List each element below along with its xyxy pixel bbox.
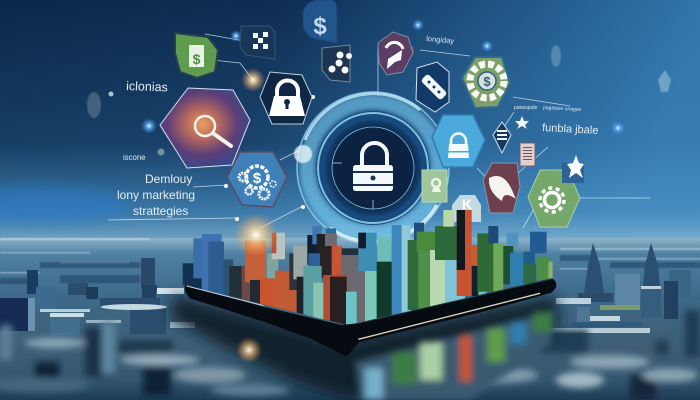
heading: marketing strategies [117, 172, 195, 218]
icon: blue dollar tile [303, 0, 337, 43]
icon: green document hexagon: $ [193, 51, 201, 67]
icon: green document hexagon [175, 33, 218, 78]
icon: blue dollar tile: $ [313, 13, 327, 40]
icon: dark dots tile top [240, 26, 275, 59]
background city: ground plane [0, 238, 700, 400]
icon: pale green tile [422, 170, 447, 202]
icon: gears and dollar hexagon [227, 152, 287, 207]
icon: leaf hexagon [483, 163, 520, 213]
background sky [0, 0, 700, 260]
heading: marketing strategies: strattegies [133, 204, 188, 218]
platform shadow and reflection [170, 295, 560, 400]
connector lines and nodes [108, 34, 650, 228]
central lock disc [325, 120, 421, 216]
label: small right captions: patarsjade [514, 105, 538, 111]
concentric rings glow [297, 92, 449, 244]
label: iscone: iscone [123, 153, 146, 162]
icon: small star [515, 116, 529, 129]
icon: pale K tile: K [462, 196, 472, 212]
decorative light nodes [87, 19, 671, 221]
icon: dark dots tile right [322, 45, 352, 82]
tablet base [185, 278, 556, 357]
label: iclonias: iclonias [126, 79, 168, 94]
label: funbla jbale: funbla jbale [542, 122, 599, 137]
light flares [234, 213, 278, 363]
icon: green gear hexagon [528, 170, 580, 227]
icon: pale K tile [452, 195, 481, 222]
icon: document [520, 143, 535, 166]
icon: gears and dollar hexagon: $ [253, 170, 262, 187]
icon: outlined pill hexagon [416, 62, 449, 112]
label: small right captions: pagelase unagan [543, 105, 582, 113]
icon: green dollar burst hexagon [462, 57, 510, 108]
left background buildings [0, 258, 195, 335]
miniature skyline on tablet [183, 210, 556, 357]
icon: magnifier hexagon [160, 88, 250, 168]
icon: purple arrow hexagon [378, 32, 413, 75]
right background buildings [540, 243, 691, 333]
label: longiday: longiday [426, 34, 455, 45]
blurred foreground city [0, 310, 700, 400]
heading: marketing strategies: lony marketing [117, 188, 195, 202]
icon: star tile [562, 155, 584, 183]
icon: central padlock [353, 143, 393, 191]
icon: light blue lock hexagon [432, 115, 485, 167]
icon: green dollar burst hexagon: $ [483, 74, 491, 89]
heading: marketing strategies: Demlouy [145, 172, 192, 186]
icon: small diamond list [493, 122, 511, 153]
label: small right captions [514, 105, 582, 113]
icon: padlock hexagon [260, 72, 312, 124]
